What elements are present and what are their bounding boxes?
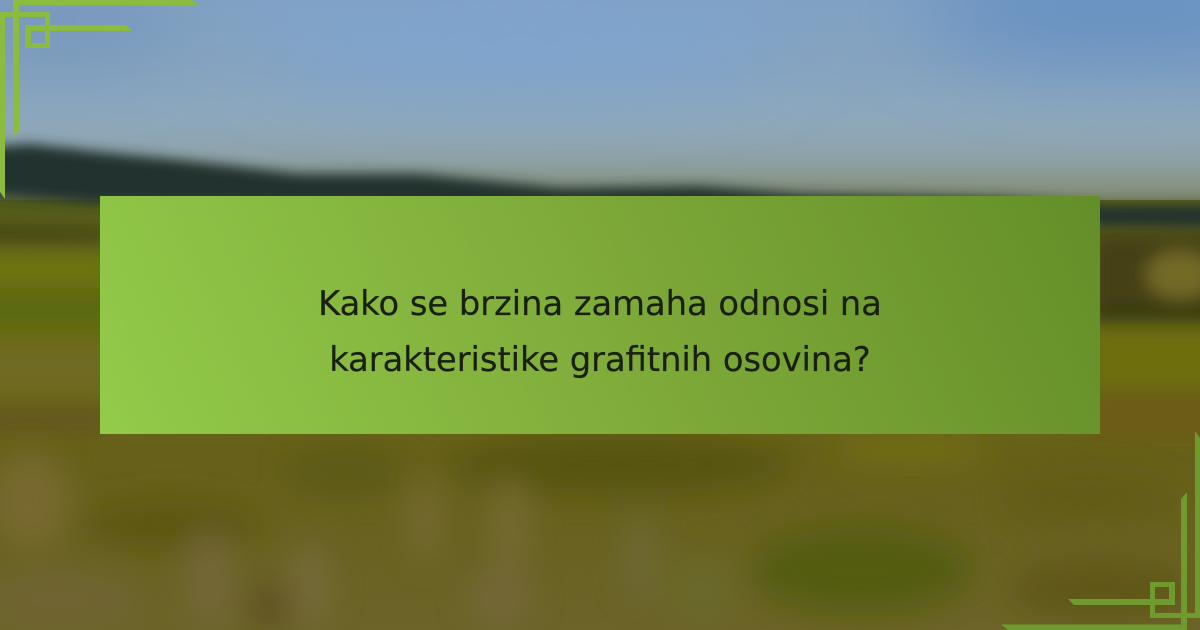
heading: Kako se brzina zamaha odnosi na [318, 284, 882, 323]
grass texture [0, 434, 1190, 630]
right hillside [1090, 232, 1200, 322]
corner ornament: top left [0, 0, 199, 199]
corner ornament: bottom right [1001, 431, 1200, 630]
left hillside [0, 195, 110, 217]
treeline [0, 144, 1200, 228]
heading: karakteristike grafitnih osovina? [329, 340, 871, 379]
heading [318, 284, 882, 379]
title panel [100, 196, 1100, 434]
